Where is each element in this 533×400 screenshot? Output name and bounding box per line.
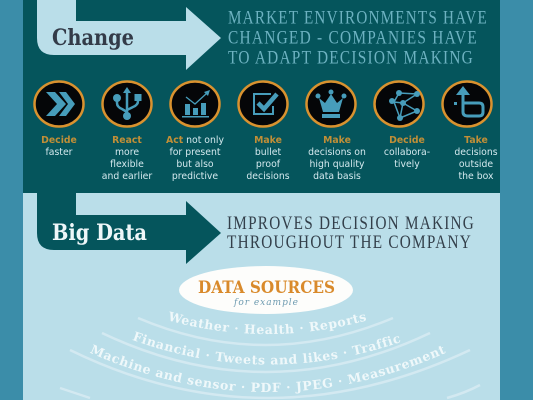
label: react: and earlier	[102, 171, 152, 182]
icon: checkbox	[238, 82, 288, 126]
icon: usb	[102, 82, 152, 126]
heading: Big Data: Big Data	[52, 220, 147, 246]
icon: outside the box	[442, 82, 492, 126]
icon: crown	[306, 82, 356, 126]
callout: data sources: DATA SOURCES	[198, 278, 335, 297]
label: make bullet proof: bullet	[255, 147, 282, 158]
text block: improves decision making	[227, 214, 475, 253]
icon: rising chart	[170, 82, 220, 126]
arcs	[60, 318, 480, 398]
text block: market environments	[228, 8, 488, 68]
label: take decisions: Take	[464, 135, 488, 146]
label: act: but also	[176, 159, 214, 170]
label: decide faster	[41, 135, 77, 158]
label: make decisions	[308, 135, 366, 182]
label: decide collaboratively	[384, 135, 430, 170]
label: decide faster: Decide	[41, 135, 77, 146]
text block: improves decision making: IMPROVES DECISION MAKING	[227, 214, 475, 234]
arrow: change	[37, 0, 221, 70]
label: act: for present	[169, 147, 221, 158]
icon: double chevron	[34, 82, 84, 126]
label: decide collaboratively: collabora-	[384, 147, 430, 158]
label: take decisions: outside	[459, 159, 493, 170]
label: decide collaboratively: tively	[394, 159, 420, 170]
curved text: sources row 1: Weather · Health · Reports	[170, 311, 366, 334]
label: decide faster: faster	[45, 147, 73, 158]
label: react	[102, 135, 152, 182]
label: make bullet proof: Make	[254, 135, 282, 146]
label: take decisions	[454, 135, 498, 182]
arrow: big data	[37, 193, 221, 264]
label: act: predictive	[172, 171, 218, 182]
label: act: Act not only	[166, 135, 224, 146]
label: make bullet proof: proof	[256, 159, 281, 170]
label: take decisions: decisions	[454, 147, 498, 158]
callout: data sources	[179, 266, 353, 314]
label: act	[166, 135, 224, 182]
label: decide collaboratively: Decide	[389, 135, 425, 146]
callout: data sources: for example	[233, 298, 298, 308]
label: make decisions: decisions on	[308, 147, 366, 158]
label: take decisions: the box	[458, 171, 494, 182]
label: react: flexible	[110, 159, 144, 170]
label: make decisions: high quality	[309, 159, 365, 170]
label: react: more	[115, 147, 139, 158]
text block: market environments: TO ADAPT DECISION MAKING	[228, 48, 474, 68]
label: make bullet proof: decisions	[246, 171, 290, 182]
text block: market environments: CHANGED - COMPANIES HAVE	[228, 28, 478, 48]
label: make decisions: data basis	[313, 171, 361, 182]
panel: change section	[23, 0, 500, 193]
icon: network	[374, 82, 424, 126]
label: make decisions: Make	[323, 135, 351, 146]
panel: big data section	[23, 193, 500, 400]
label: react: React	[112, 135, 142, 146]
curved text: sources row 3: Machine and sensor · PDF · JPEG · Measurement	[90, 344, 446, 394]
curved text: sources row 2: Financial · Tweets and likes · Traffic	[132, 332, 400, 365]
text block: improves decision making: THROUGHOUT THE COMPANY	[227, 233, 472, 253]
heading: Change: Change	[52, 25, 134, 51]
label: make bullet proof	[246, 135, 290, 182]
